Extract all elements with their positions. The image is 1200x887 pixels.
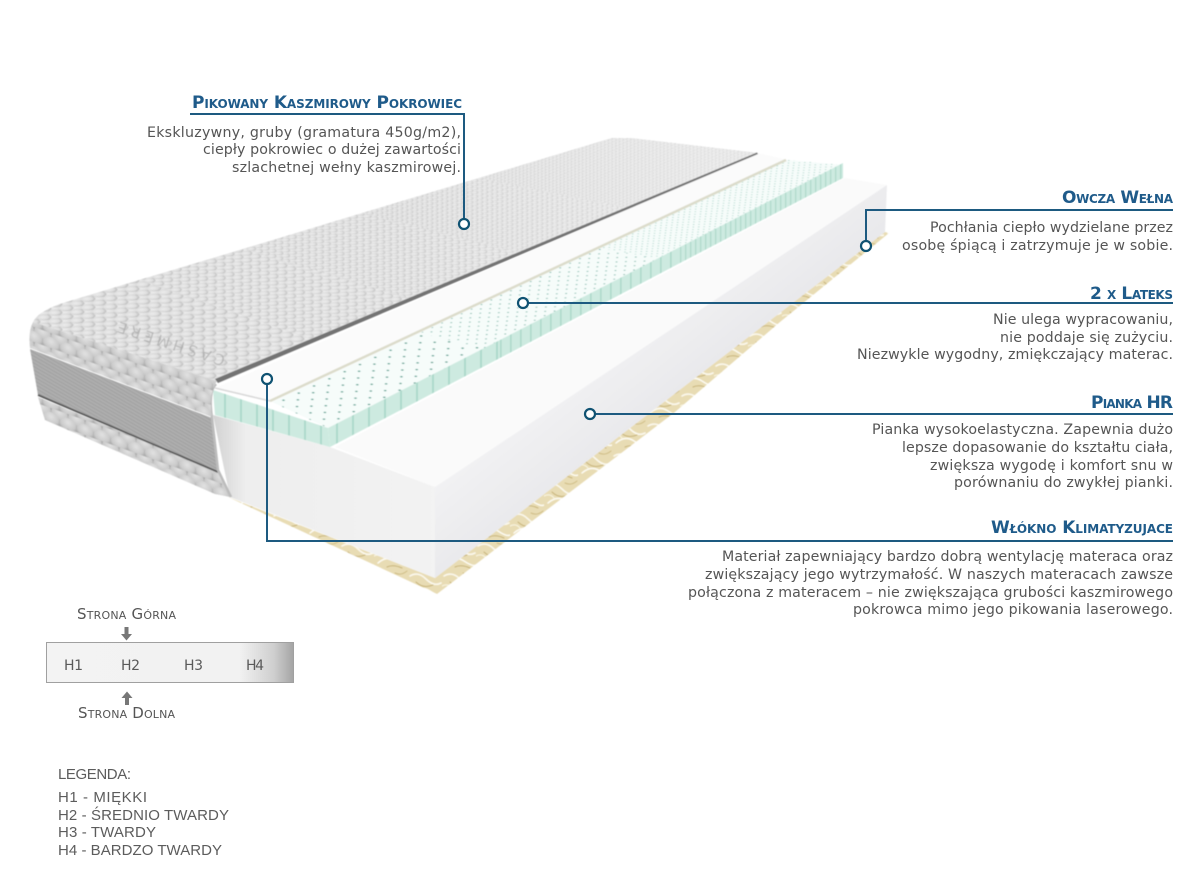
leader line bbox=[190, 114, 464, 224]
description bbox=[872, 422, 1173, 491]
label: top side: Strona Górna bbox=[77, 605, 176, 623]
description bbox=[902, 220, 1173, 254]
marker bbox=[518, 298, 528, 308]
callout: Pianka HR bbox=[585, 393, 1173, 491]
firmness bar bbox=[46, 642, 294, 682]
marker bbox=[459, 219, 469, 229]
description: pokrowca mimo jego pikowania laserowego. bbox=[853, 602, 1173, 618]
legend title: LEGENDA: bbox=[58, 766, 131, 783]
heading: 2 x Lateks bbox=[1090, 284, 1173, 304]
H2: H2 - ŚREDNIO TWARDY bbox=[58, 806, 229, 824]
quilted top surface bbox=[33, 280, 314, 381]
description: połączona z materacem – nie zwiększająca grubości kaszmirowego bbox=[688, 585, 1173, 601]
description: nie poddaje się zużyciu. bbox=[1000, 330, 1173, 346]
H4: H4 - BARDZO TWARDY bbox=[58, 842, 222, 859]
brand mark: CASHMERE bbox=[115, 318, 227, 369]
description bbox=[688, 549, 1173, 618]
callout: Pikowany Kaszmirowy Pokrowiec bbox=[147, 93, 469, 229]
H3: H3 bbox=[184, 658, 203, 674]
label: bottom side: Strona Dolna bbox=[78, 704, 175, 722]
leader line bbox=[267, 379, 1173, 541]
H4: H4 bbox=[246, 658, 264, 674]
marker bbox=[585, 409, 595, 419]
arrow: up bbox=[122, 692, 132, 705]
heading: Owcza Wełna bbox=[1062, 188, 1174, 208]
callout: 2 x Lateks bbox=[518, 284, 1173, 363]
description: osobę śpiącą i zatrzymuje je w sobie. bbox=[902, 238, 1173, 254]
latex layer bbox=[213, 160, 843, 447]
description: Nie ulega wypracowaniu, bbox=[993, 312, 1173, 328]
leader line bbox=[523, 302, 1173, 304]
arrow: down bbox=[121, 627, 132, 640]
description: Pochłania ciepło wydzielane przez bbox=[930, 220, 1173, 236]
heading: Pikowany Kaszmirowy Pokrowiec bbox=[192, 93, 462, 113]
leader line bbox=[590, 413, 1173, 415]
mattress illustration bbox=[29, 138, 889, 594]
leader line bbox=[866, 210, 1173, 245]
legend bbox=[58, 766, 229, 859]
callout: Owcza Wełna bbox=[861, 188, 1174, 254]
marker bbox=[262, 374, 272, 384]
description: porównaniu do zwykłej pianki. bbox=[954, 475, 1173, 491]
foam HR layer bbox=[213, 178, 887, 578]
heading: Pianka HR bbox=[1091, 393, 1173, 413]
H2: H2 bbox=[121, 658, 140, 674]
description: szlachetnej wełny kaszmirowej. bbox=[232, 160, 461, 176]
white latex top sheet bbox=[215, 153, 788, 402]
H1: H1 bbox=[64, 658, 83, 674]
description: zwiększa wygodę i komfort snu w bbox=[930, 458, 1173, 474]
description: Ekskluzywny, gruby (gramatura 450g/m2), bbox=[147, 125, 461, 141]
firmness diagram bbox=[46, 605, 294, 722]
grey side strip bbox=[30, 349, 218, 472]
top quilted front bbox=[29, 322, 217, 417]
description: Materiał zapewniający bardzo dobrą wentylację materaca oraz bbox=[722, 549, 1173, 565]
H1: H1 - MIĘKKI bbox=[58, 789, 147, 806]
description: ciepły pokrowiec o dużej zawartości bbox=[203, 142, 461, 158]
H3: H3 - TWARDY bbox=[58, 824, 156, 841]
description: lepsze dopasowanie do kształtu ciała, bbox=[902, 440, 1173, 456]
description: Niezwykle wygodny, zmiękczający materac. bbox=[857, 347, 1173, 363]
bottom quilted side bbox=[38, 397, 230, 497]
quilted top underlay bbox=[33, 138, 758, 381]
description: Pianka wysokoelastyczna. Zapewnia dużo bbox=[872, 422, 1173, 438]
callout: Włókno Klimatyzujace bbox=[262, 374, 1173, 618]
dark cover edge bbox=[215, 152, 758, 383]
heading: Włókno Klimatyzujace bbox=[991, 518, 1173, 538]
description bbox=[147, 125, 461, 176]
description bbox=[857, 312, 1173, 363]
description: zwiększający jego wytrzymałość. W naszych materacach zawsze bbox=[705, 567, 1173, 583]
marker bbox=[861, 241, 871, 251]
wool layer bbox=[228, 232, 889, 594]
cashmere cover bbox=[29, 138, 758, 497]
cover wrap edge bbox=[211, 384, 231, 497]
